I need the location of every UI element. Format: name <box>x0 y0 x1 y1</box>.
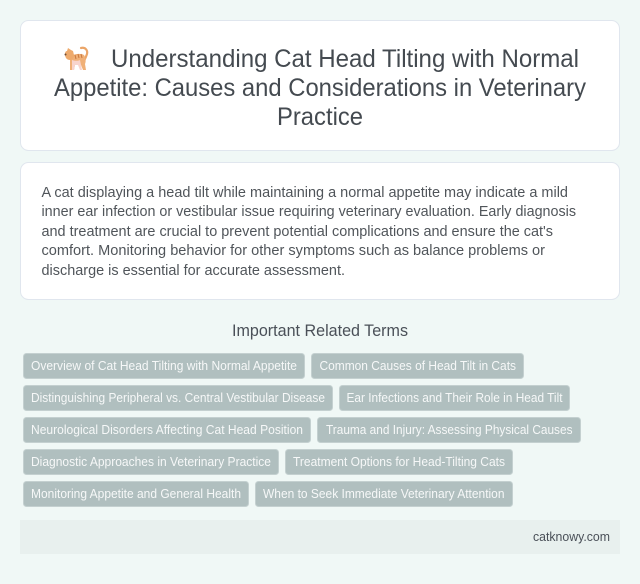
tag: Treatment Options for Head-Tilting Cats <box>293 454 505 469</box>
text block: description <box>42 184 576 279</box>
tag: Ear Infections and Their Role in Head Tilt <box>346 390 563 405</box>
panel: description <box>20 162 620 300</box>
text block: description: discharge is essential for accurate assessment. <box>42 262 345 279</box>
tag <box>312 354 524 378</box>
tag: Monitoring Appetite and General Health <box>31 486 241 501</box>
heading: related terms: Important Related Terms <box>232 322 408 340</box>
tag: Diagnostic Approaches in Veterinary Practice <box>31 454 271 469</box>
tag <box>24 418 310 442</box>
tag <box>24 354 304 378</box>
text block: description: inner ear infection or vestibular issue requiring veterinary evaluation. Early diagnosis <box>42 203 576 220</box>
tag: Common Causes of Head Tilt in Cats <box>320 358 516 373</box>
tag <box>24 482 248 506</box>
tag <box>340 386 570 410</box>
tag: Trauma and Injury: Assessing Physical Causes <box>326 422 572 437</box>
footer: catknowy.com <box>533 530 610 544</box>
title: Appetite: Causes and Considerations in Veterinary <box>54 74 586 102</box>
tag <box>286 450 512 474</box>
icon: cat <box>64 48 87 70</box>
title <box>54 45 586 131</box>
text block: description: comfort. Monitoring behavior for other symptoms such as balance problems or <box>42 242 545 259</box>
text block: description: and treatment are crucial to prevent potential complications and ensure the cat's <box>42 223 553 240</box>
tag <box>24 386 332 410</box>
tag: When to Seek Immediate Veterinary Attention <box>263 486 504 501</box>
tag <box>256 482 512 506</box>
footer <box>20 520 620 554</box>
title: Understanding Cat Head Tilting with Normal <box>111 45 579 73</box>
title: Practice <box>277 103 363 131</box>
tag: Neurological Disorders Affecting Cat Head Position <box>31 422 303 437</box>
panel: title card <box>20 20 620 150</box>
tags: related terms <box>24 354 580 506</box>
tag <box>318 418 580 442</box>
tag <box>24 450 278 474</box>
tag: Distinguishing Peripheral vs. Central Vestibular Disease <box>31 390 325 405</box>
tag: Overview of Cat Head Tilting with Normal Appetite <box>31 358 297 373</box>
text block: description: A cat displaying a head tilt while maintaining a normal appetite may indicate a mild <box>42 184 568 201</box>
